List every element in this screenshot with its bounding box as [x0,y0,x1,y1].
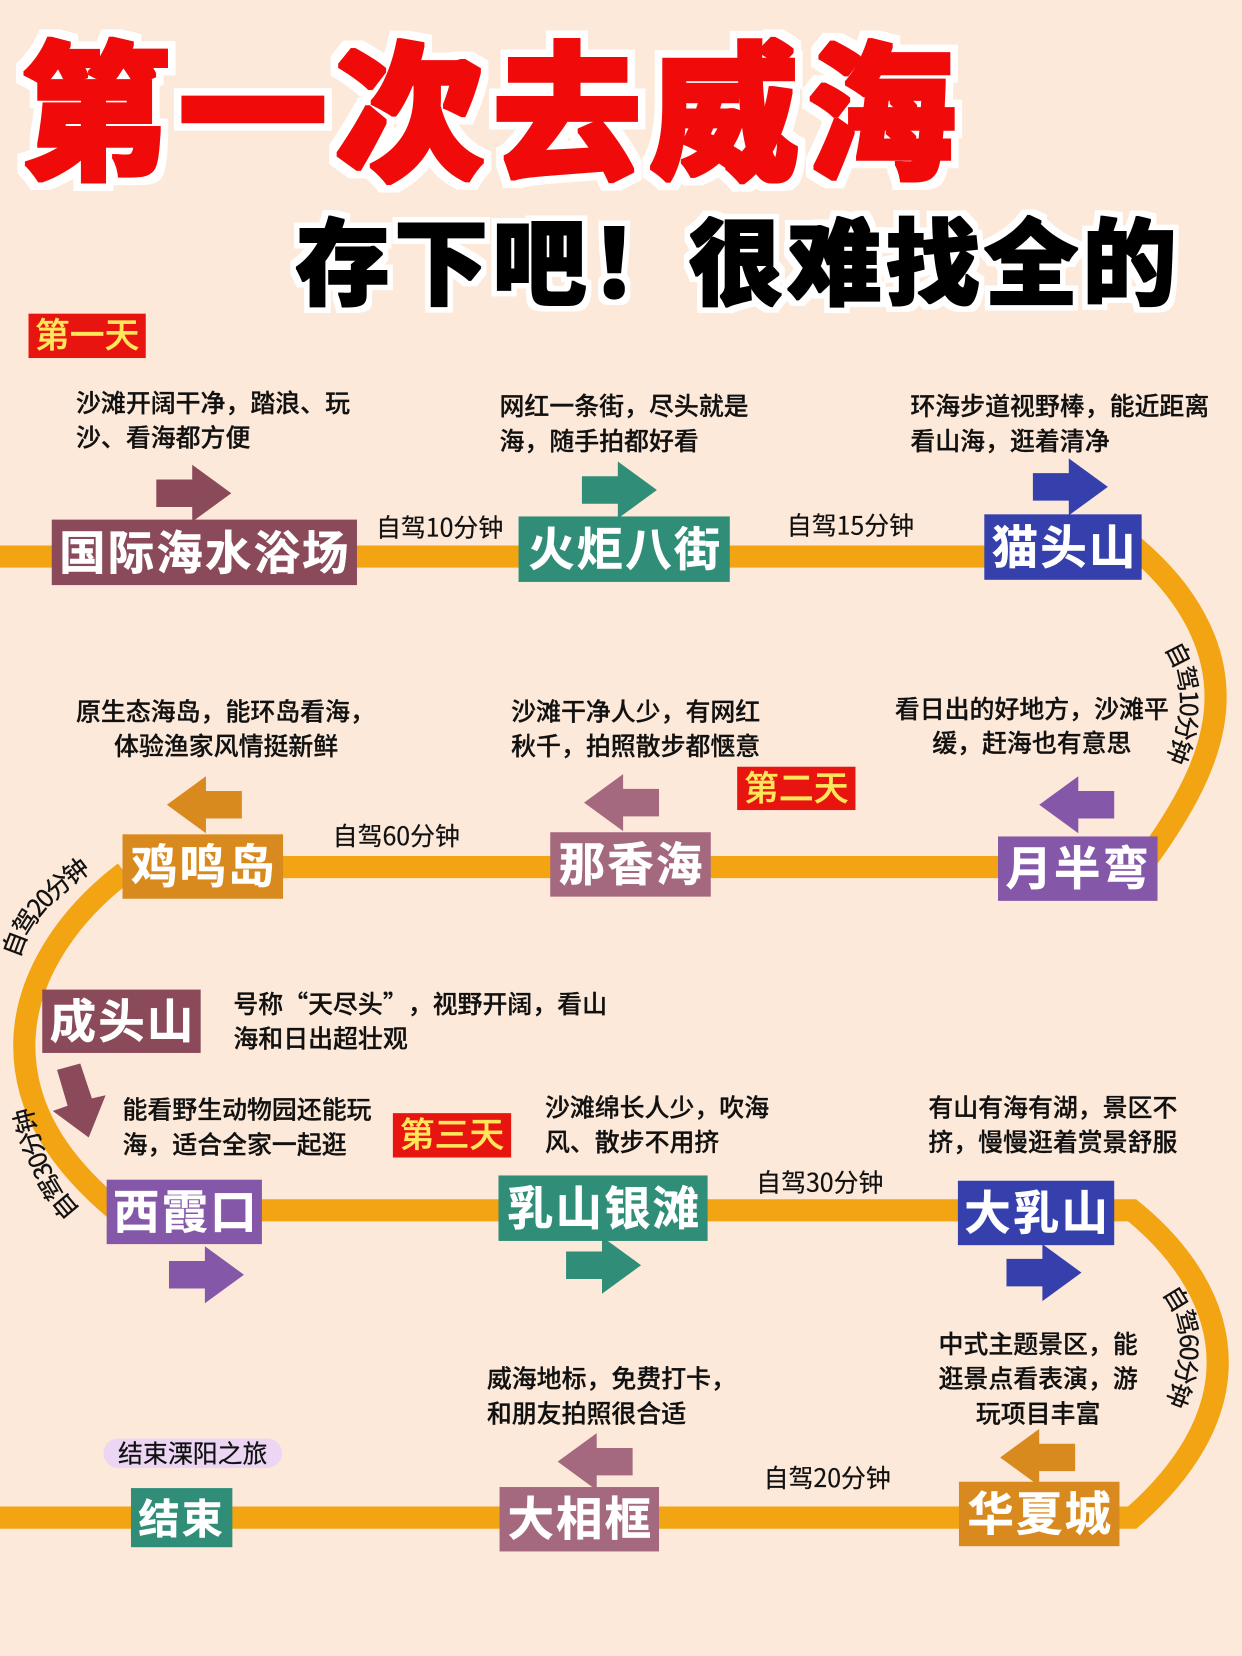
description: 华夏城: 逛景点看表演，游 [939,1360,1138,1396]
end note pill: 结束溧阳之旅 [118,1435,267,1471]
curved drive time: 30 minutes: 自驾30分钟 [12,1109,79,1219]
description: 大相框: 和朋友拍照很合适 [487,1395,686,1431]
arrow: 成头山 [53,1064,106,1137]
description: 鸡鸣岛: 原生态海岛，能环岛看海， [76,692,375,728]
stop: 华夏城: 华夏城 [967,1477,1113,1544]
drive time: 15 minutes: 自驾15分钟 [787,506,914,542]
description: 西霞口: 海，适合全家一起逛 [123,1125,347,1161]
day tag: day two: 第二天 [744,762,849,812]
description: 火炬八街: 网红一条街，尽头就是 [500,387,749,423]
description: 大相框: 威海地标，免费打卡， [487,1360,736,1396]
stop: 西霞口: 西霞口 [113,1175,259,1242]
stop: 大乳山: 大乳山 [964,1176,1110,1243]
description: 西霞口: 能看野生动物园还能玩 [123,1090,372,1126]
description: 那香海: 秋千，拍照散步都惬意 [511,727,760,763]
arrow: 火炬八街 [582,462,657,519]
description: 鸡鸣岛: 体验渔家风情挺新鲜 [114,727,338,763]
stop: 猫头山: 猫头山 [992,511,1137,578]
route line [0,545,1218,1518]
description: 月半弯: 缓，赶海也有意思 [932,724,1131,760]
arrow: 西霞口 [169,1246,244,1303]
arrow: 猫头山 [1033,458,1108,515]
stop: 月半弯: 月半弯 [1005,832,1151,899]
curved drive time: 10 minutes: 自驾10分钟 [1164,643,1200,764]
arrow: 那香海 [584,774,659,831]
arrow: 鸡鸣岛 [167,776,242,833]
description: 乳山银滩: 沙滩绵长人少，吹海 [545,1088,769,1124]
description: 华夏城: 玩项目丰富 [976,1395,1100,1431]
description: 成头山: 海和日出超壮观 [233,1020,408,1056]
curved drive time: 60 minutes: 自驾60分钟 [1162,1286,1200,1408]
subtitle: 存下吧！很难找全的 [296,189,1177,325]
arrow: 华夏城 [1000,1429,1075,1486]
drive time: 20 minutes: 自驾20分钟 [764,1459,891,1495]
arrow: 大乳山 [1006,1244,1081,1301]
stop: 成头山: 成头山 [50,985,195,1052]
stop: 那香海: 那香海 [559,828,704,895]
description: 猫头山: 环海步道视野棒，能近距离 [910,387,1209,423]
description: 国际海水浴场: 沙、看海都方便 [76,419,250,455]
description: 成头山: 号称“天尽头”，视野开阔，看山 [233,985,607,1021]
description: 大乳山: 挤，慢慢逛着赏景舒服 [928,1123,1177,1159]
description: 华夏城: 中式主题景区，能 [939,1325,1138,1361]
drive time: 30 minutes: 自驾30分钟 [756,1163,883,1199]
day tag: day one: 第一天 [35,308,139,358]
arrow: 国际海水浴场 [156,465,231,522]
description: 国际海水浴场: 沙滩开阔干净，踏浪、玩 [76,384,350,420]
arrow: 乳山银滩 [566,1237,641,1294]
day tag: day three: 第三天 [400,1108,504,1158]
description: 那香海: 沙滩干净人少，有网红 [511,692,760,728]
arrow: 月半弯 [1039,776,1114,833]
stop: 鸡鸣岛: 鸡鸣岛 [131,830,277,897]
description: 大乳山: 有山有海有湖，景区不 [928,1088,1177,1124]
main title: 第一次去威海 [21,0,956,210]
stop: 乳山银滩: 乳山银滩 [507,1172,701,1239]
description: 月半弯: 看日出的好地方，沙滩平 [895,690,1169,726]
stop: 火炬八街: 火炬八街 [528,513,722,580]
description: 乳山银滩: 风、散步不用挤 [545,1123,719,1159]
drive time: 10 minutes: 自驾10分钟 [376,509,503,545]
stop: 结束: 结束 [138,1485,225,1545]
description: 火炬八街: 海，随手拍都好看 [500,422,699,458]
drive time: 60 minutes: 自驾60分钟 [333,817,460,853]
stop: 国际海水浴场: 国际海水浴场 [59,516,351,583]
arrow: 大相框 [558,1433,633,1490]
stop: 大相框: 大相框 [507,1483,653,1550]
description: 猫头山: 看山海，逛着清净 [910,422,1110,458]
